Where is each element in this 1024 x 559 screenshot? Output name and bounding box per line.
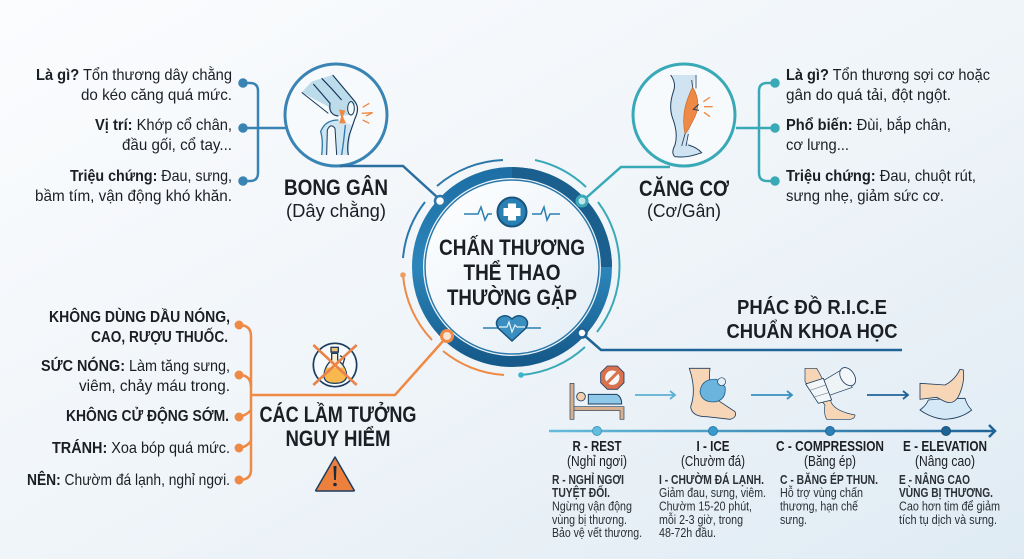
text: rest details: Ngừng vận động <box>552 498 632 514</box>
bracket: misconceptions <box>236 322 444 483</box>
text: rest details: Bảo vệ vết thương. <box>552 525 642 540</box>
icon: medical cross <box>464 198 560 226</box>
centre hub <box>400 160 620 378</box>
step labels: (Chườm đá) <box>681 454 745 470</box>
text: elevation details: VÙNG BỊ THƯƠNG. <box>899 485 993 500</box>
panel: misconceptions list: CAO, RƯỢU THUỐC. <box>91 326 228 346</box>
text: compression details: thương, hạn chế <box>780 498 859 514</box>
heading: misconceptions: CÁC LẦM TƯỞNG <box>260 402 416 427</box>
panel: căng cơ description: cơ lưng... <box>786 137 849 154</box>
step labels: R - REST <box>572 438 622 455</box>
heading: căng cơ: CĂNG CƠ <box>639 176 729 201</box>
text: ice details <box>659 472 766 540</box>
title: THƯỜNG GẶP <box>447 285 577 310</box>
panel: bong gân description: đầu gối, cổ tay... <box>122 136 232 154</box>
panel: bong gân description <box>35 65 232 205</box>
panel: misconceptions list: KHÔNG CỬ ĐỘNG SỚM. <box>66 406 229 425</box>
title: THỂ THAO <box>464 260 560 285</box>
text: compression details <box>780 472 878 527</box>
panel: misconceptions list: KHÔNG DÙNG DẦU NÓNG, <box>49 307 230 326</box>
arrow: rest to ice <box>635 391 675 399</box>
text: rest details: R - NGHỈ NGƠI <box>552 472 624 487</box>
step labels: I - ICE <box>696 438 730 455</box>
text: elevation details: Cao hơn tim để giảm <box>899 498 1000 514</box>
step labels: C - COMPRESSION <box>776 438 884 455</box>
bracket: bong gân <box>240 80 286 184</box>
text: rest details <box>552 472 642 540</box>
arrow: ice to compression <box>751 391 792 399</box>
text: elevation details: tích tụ dịch và sưng. <box>899 512 997 527</box>
panel: căng cơ description: Phổ biến: Đùi, bắp chân, <box>786 115 951 134</box>
heading: bong gân: (Dây chằng) <box>286 200 386 221</box>
heading: bong gân: BONG GÂN <box>284 175 388 200</box>
text: elevation details: E - NÂNG CAO <box>899 472 970 487</box>
connector: bong gân to centre <box>340 166 437 197</box>
connector: căng cơ to centre <box>586 167 670 198</box>
panel: bong gân description: Vị trí: Khớp cổ chân, <box>95 116 232 134</box>
heading: bong gân <box>284 175 388 221</box>
icon: elevated foot on pillow <box>920 369 972 419</box>
icon: knee <box>285 64 387 166</box>
heading: căng cơ: (Cơ/Gân) <box>647 201 721 221</box>
title <box>439 235 585 310</box>
panel: căng cơ description: gân do quá tải, đột ngột. <box>786 87 951 104</box>
icon: heart <box>483 316 541 341</box>
text: elevation details <box>899 472 1000 527</box>
panel: căng cơ description <box>786 66 990 205</box>
text: rest details: vùng bị thương. <box>552 512 627 527</box>
icon: banned oil bottle <box>313 343 357 387</box>
text: ice details: mỗi 2-3 giờ, trong <box>659 512 743 527</box>
heading: R.I.C.E protocol: PHÁC ĐỒ R.I.C.E <box>737 295 887 319</box>
step labels <box>567 438 987 470</box>
bracket: căng cơ <box>736 80 778 184</box>
text: compression details: sưng. <box>780 512 807 527</box>
timeline <box>549 425 995 437</box>
heading: R.I.C.E protocol: CHUẨN KHOA HỌC <box>726 320 898 343</box>
panel: căng cơ description: Là gì? Tổn thương sợi cơ hoặc <box>786 66 990 84</box>
heading: misconceptions: NGUY HIỂM <box>286 426 390 451</box>
text: rest details: TUYỆT ĐỐI. <box>552 485 610 500</box>
icon: rest bed <box>570 366 624 419</box>
panel: misconceptions list: viêm, chảy máu trong. <box>79 378 230 395</box>
text: ice details: I - CHƯỜM ĐÁ LẠNH. <box>659 472 764 487</box>
text: compression details: Hỗ trợ vùng chấn <box>780 485 863 500</box>
step labels: (Nghỉ ngơi) <box>567 454 627 470</box>
icon: compression bandage <box>805 365 859 419</box>
panel: misconceptions list: SỨC NÓNG: Làm tăng sưng, <box>41 356 230 375</box>
heading: R.I.C.E protocol <box>726 295 898 343</box>
panel: misconceptions list: TRÁNH: Xoa bóp quá mức. <box>52 438 230 457</box>
arrow: compression to elevation <box>867 391 908 399</box>
panel: căng cơ description: sưng nhẹ, giảm sức cơ. <box>786 188 944 205</box>
title: CHẤN THƯƠNG <box>439 235 585 260</box>
step labels: (Băng ép) <box>804 454 856 470</box>
heading: căng cơ <box>639 176 729 221</box>
panel: bong gân description: Triệu chứng: Đau, sưng, <box>70 168 232 185</box>
icon: ice pack on foot <box>689 368 736 419</box>
icon: calf muscle <box>633 64 735 166</box>
connector: centre to R.I.C.E <box>585 336 902 350</box>
step labels: E - ELEVATION <box>903 438 987 455</box>
heading: misconceptions <box>260 402 416 451</box>
panel: misconceptions list <box>27 307 230 489</box>
panel: bong gân description: do kéo căng quá mức. <box>81 87 232 104</box>
step labels: (Nâng cao) <box>915 454 975 470</box>
panel: căng cơ description: Triệu chứng: Đau, chuột rút, <box>786 168 976 185</box>
panel: bong gân description: Là gì? Tổn thương dây chằng <box>36 65 232 84</box>
text: ice details: 48-72h đầu. <box>659 525 716 540</box>
text: compression details: C - BĂNG ÉP THUN. <box>780 472 878 487</box>
text: ice details: Chườm 15-20 phút, <box>659 498 752 514</box>
panel: misconceptions list: NÊN: Chườm đá lạnh, nghỉ ngơi. <box>27 470 230 489</box>
icon: warning triangle <box>316 457 354 491</box>
panel: bong gân description: bầm tím, vận động khó khăn. <box>35 188 232 205</box>
text: ice details: Giảm đau, sưng, viêm. <box>659 485 766 500</box>
